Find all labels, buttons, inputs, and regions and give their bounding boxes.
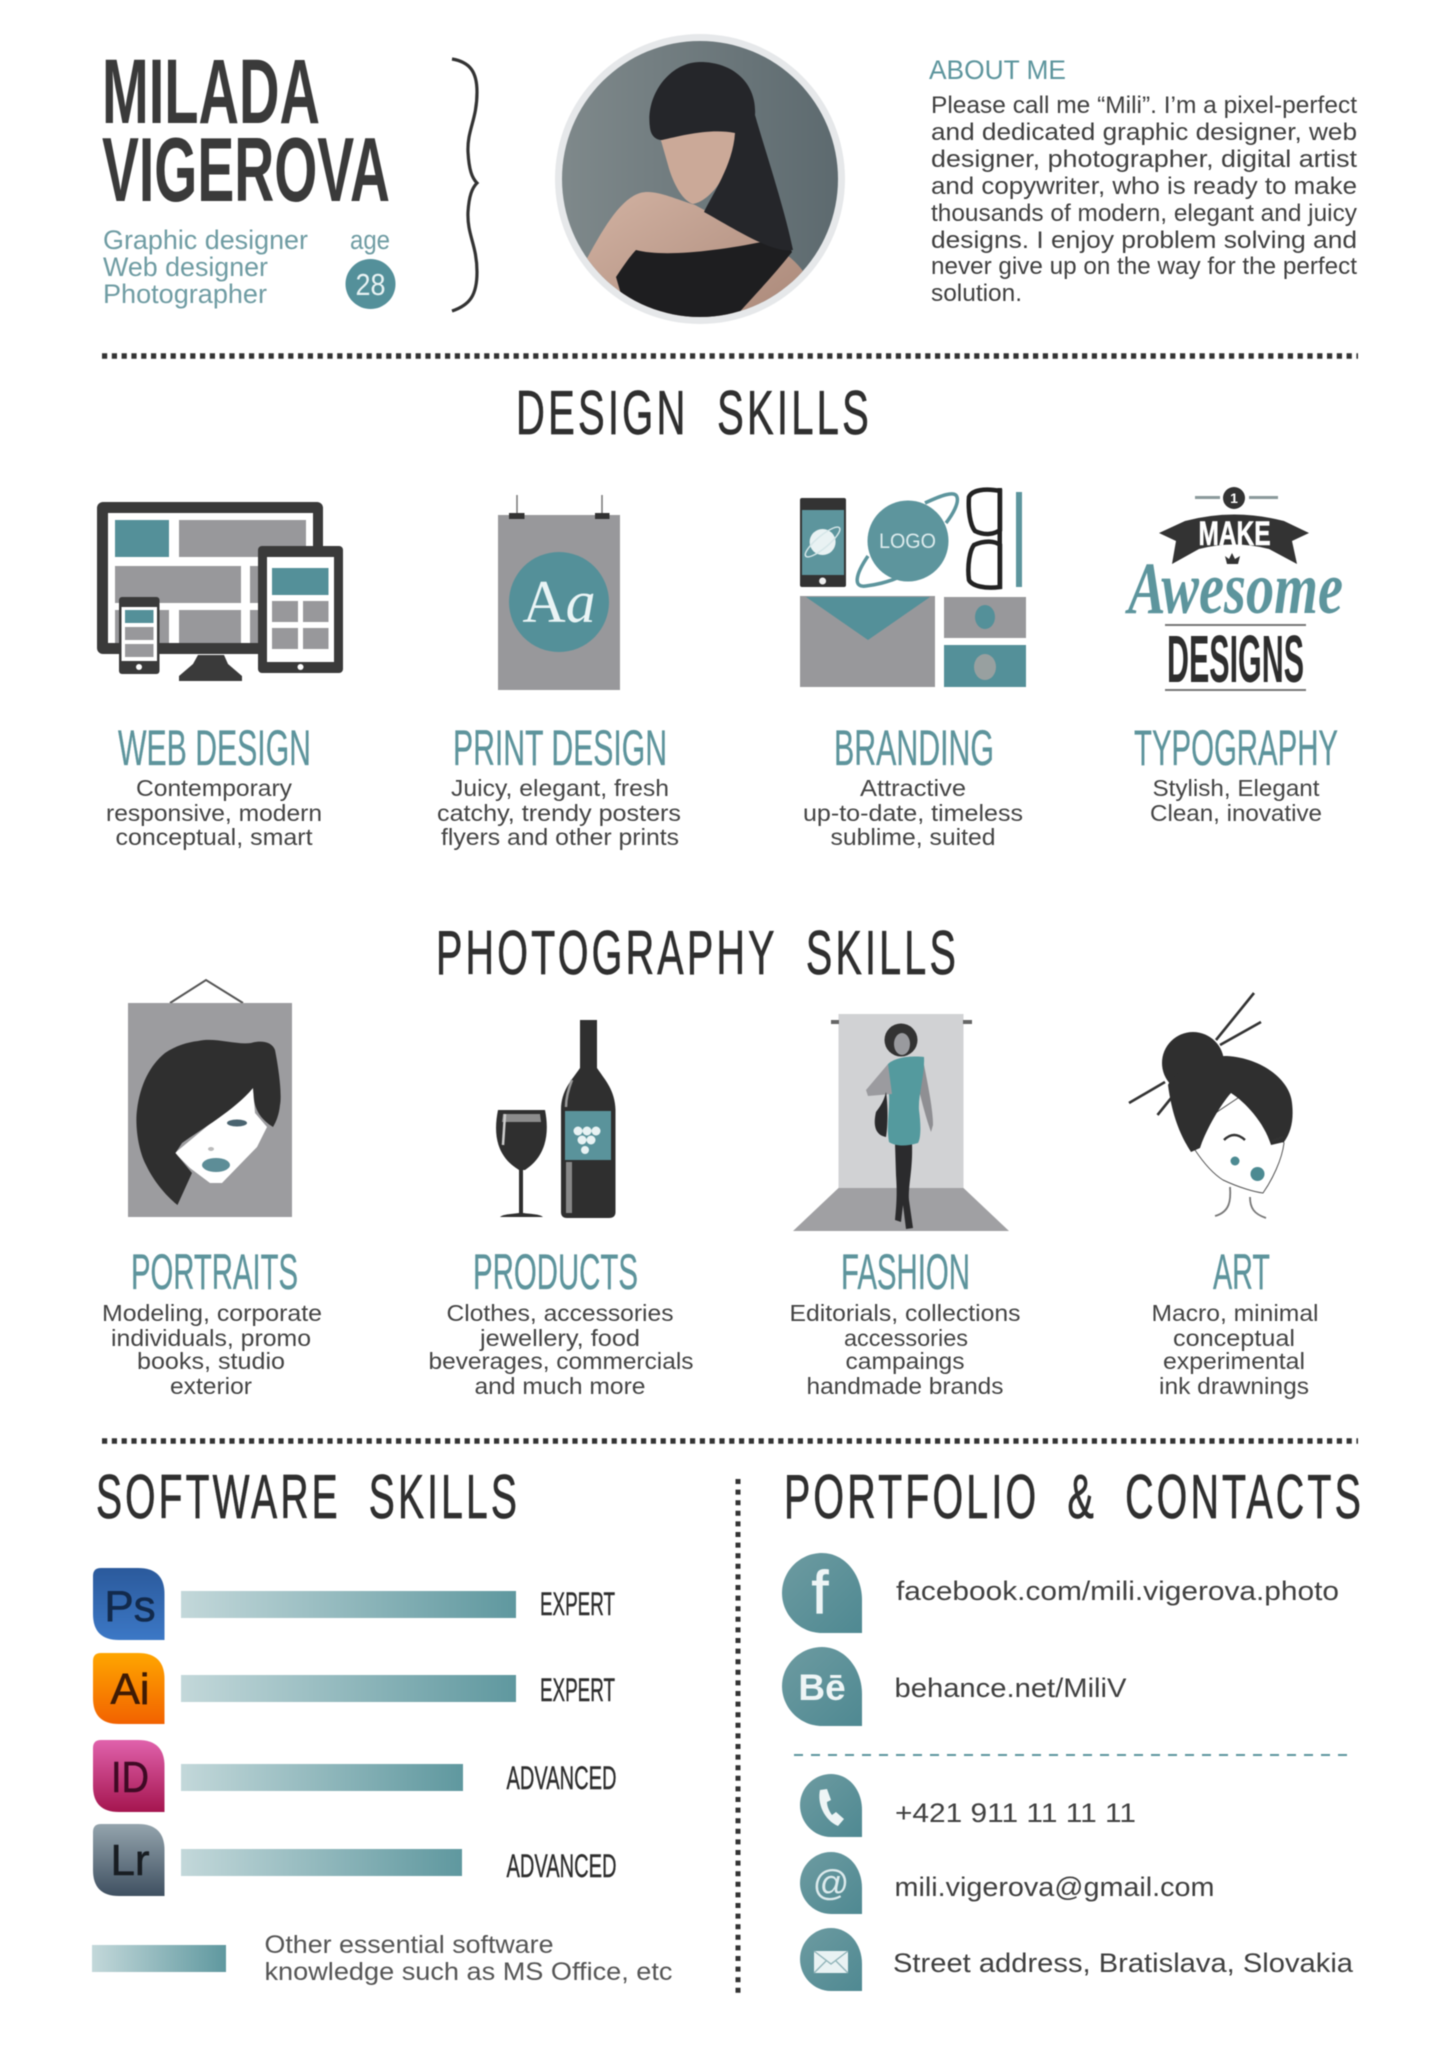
age badge: 28 <box>356 267 386 302</box>
label: web design: Contemporary <box>136 775 293 801</box>
label: products: Clothes, accessories <box>446 1300 674 1326</box>
other software note: Other essential software <box>264 1931 554 1959</box>
about me: solution. <box>931 280 1022 307</box>
about me: thousands of modern, elegant and juicy <box>931 200 1357 227</box>
label: fashion: accessories <box>844 1325 968 1351</box>
skill: lightroom: Lr <box>110 1836 150 1885</box>
icon: typography lettering: 1 <box>1230 490 1238 506</box>
label: typography: Clean, inovative <box>1150 800 1322 826</box>
heading: design skills: DESIGN SKILLS <box>516 379 872 448</box>
job titles <box>103 225 308 309</box>
skill: illustrator <box>93 1653 615 1724</box>
label: print design: catchy, trendy posters <box>437 800 681 826</box>
label: products: beverages, commercials <box>428 1348 694 1374</box>
label: products: PRODUCTS <box>473 1244 638 1300</box>
icon: art geisha <box>1129 993 1293 1218</box>
contact: address: Street address, Bratislava, Slovakia <box>893 1948 1354 1978</box>
header: name: VIGEROVA <box>102 120 390 221</box>
job titles: Web designer <box>103 252 268 282</box>
label: portraits <box>102 1244 322 1399</box>
heading: photography skills: PHOTOGRAPHY SKILLS <box>436 919 959 988</box>
age badge: age <box>350 225 390 255</box>
skill: photoshop <box>93 1568 615 1640</box>
label: print design: PRINT DESIGN <box>453 720 667 776</box>
contact: phone: +421 911 11 11 11 <box>895 1798 1136 1828</box>
label: portraits: books, studio <box>137 1348 285 1374</box>
about me: Please call me “Mili”. I’m a pixel-perfect <box>931 92 1357 119</box>
icon: fashion model <box>793 1014 1009 1231</box>
contact: email <box>800 1852 1214 1914</box>
about me: and dedicated graphic designer, web <box>931 119 1357 146</box>
label: print design: Juicy, elegant, fresh <box>451 775 669 801</box>
label: fashion: Editorials, collections <box>790 1300 1020 1326</box>
contact: phone <box>800 1774 1136 1837</box>
icon: poster: Aa <box>522 569 596 635</box>
skill: photoshop: EXPERT <box>540 1586 615 1622</box>
skill: illustrator: Ai <box>110 1665 150 1714</box>
label: web design: responsive, modern <box>106 800 322 826</box>
about me: designs. I enjoy problem solving and <box>931 227 1357 254</box>
label: web design <box>106 720 322 850</box>
contact: email: mili.vigerova@gmail.com <box>894 1872 1214 1902</box>
icon: wine glass and bottle <box>496 1020 616 1218</box>
contact: address <box>800 1928 1354 1991</box>
label: portraits: individuals, promo <box>111 1325 311 1351</box>
icon: branding set: LOGO <box>879 530 936 553</box>
other software note: knowledge such as MS Office, etc <box>264 1958 672 1986</box>
header: name <box>102 41 390 221</box>
label: web design: WEB DESIGN <box>118 720 311 776</box>
skill: indesign: ADVANCED <box>506 1760 616 1796</box>
contact: behance: Bē <box>798 1667 846 1708</box>
label: branding: up-to-date, timeless <box>803 800 1023 826</box>
label: products: and much more <box>474 1373 646 1399</box>
icon: typography lettering: Awesome <box>1125 548 1343 630</box>
header: name: MILADA <box>102 41 320 143</box>
label: art: ART <box>1213 1244 1270 1300</box>
label: print design <box>437 720 681 850</box>
icon: typography lettering <box>1125 487 1343 697</box>
about me: ABOUT ME <box>929 55 1066 85</box>
contact: facebook <box>782 1553 1339 1633</box>
contact: behance: behance.net/MiliV <box>894 1673 1126 1703</box>
label: fashion <box>790 1244 1020 1399</box>
contact: facebook: f <box>812 1559 829 1626</box>
label: art: experimental <box>1163 1348 1305 1374</box>
curly brace <box>452 59 477 311</box>
label: fashion: FASHION <box>841 1244 970 1300</box>
job titles: Photographer <box>103 279 267 309</box>
skill: photoshop: Ps <box>104 1582 156 1631</box>
icon: typography lettering: MAKE <box>1198 515 1270 553</box>
label: branding: BRANDING <box>834 720 994 776</box>
contact: facebook: facebook.com/mili.vigerova.photo <box>896 1576 1339 1606</box>
icon: poster <box>498 495 620 690</box>
contact: email: @ <box>813 1862 849 1903</box>
heading: software skills: SOFTWARE SKILLS <box>96 1463 520 1532</box>
other software note <box>92 1931 672 1986</box>
label: art: Macro, minimal <box>1152 1300 1318 1326</box>
skill: indesign <box>93 1740 616 1812</box>
icon: portrait frame <box>128 980 292 1217</box>
label: web design: conceptual, smart <box>116 824 313 850</box>
label: portraits: exterior <box>170 1373 252 1399</box>
about me: never give up on the way for the perfect <box>931 253 1357 280</box>
label: art <box>1152 1244 1318 1399</box>
label: products: jewellery, food <box>479 1325 640 1351</box>
skill: lightroom <box>93 1824 616 1896</box>
label: portraits: Modeling, corporate <box>102 1300 322 1326</box>
label: products <box>428 1244 694 1399</box>
label: branding: sublime, suited <box>830 824 996 850</box>
about me: designer, photographer, digital artist <box>931 146 1357 173</box>
label: branding: Attractive <box>860 775 966 801</box>
skill: lightroom: ADVANCED <box>506 1848 616 1884</box>
portrait photo <box>555 34 845 330</box>
label: art: ink drawnings <box>1159 1373 1309 1399</box>
contact: behance <box>782 1647 1126 1726</box>
job titles: Graphic designer <box>103 225 308 255</box>
icon: branding set <box>800 488 1026 687</box>
label: portraits: PORTRAITS <box>131 1244 298 1300</box>
label: typography: Stylish, Elegant <box>1152 775 1320 801</box>
label: print design: flyers and other prints <box>441 824 679 850</box>
label: typography <box>1134 720 1338 826</box>
label: branding <box>803 720 1023 850</box>
label: fashion: campaings <box>846 1348 964 1374</box>
about me: and copywriter, who is ready to make <box>931 173 1357 200</box>
about me <box>929 55 1357 307</box>
age badge <box>346 225 396 309</box>
label: art: conceptual <box>1173 1325 1295 1351</box>
skill: illustrator: EXPERT <box>540 1672 615 1708</box>
label: fashion: handmade brands <box>806 1373 1004 1399</box>
icon: responsive devices <box>97 502 343 681</box>
skill: indesign: ID <box>111 1753 149 1802</box>
